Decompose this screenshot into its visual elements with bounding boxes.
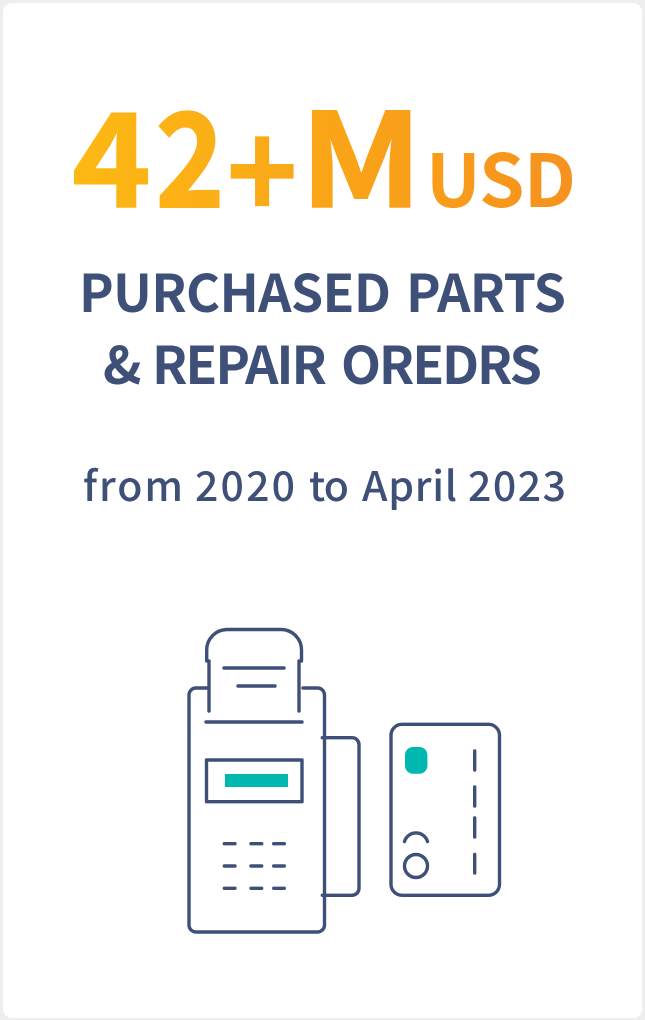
- side card reader: [322, 738, 359, 895]
- digit 2: 2: [156, 57, 225, 245]
- screen display bar: [225, 774, 288, 787]
- subheading: date range: [83, 453, 566, 513]
- date word: to: to: [309, 453, 349, 513]
- card circle: [404, 854, 428, 878]
- headline figure: 42+M USD: [72, 56, 576, 258]
- card dashes: [473, 751, 476, 873]
- date word: 2020: 2020: [195, 453, 295, 513]
- contactless arc: [404, 833, 428, 842]
- terminal screen: [206, 760, 302, 802]
- card outline: [391, 724, 500, 895]
- heading word: REPAIR: REPAIR: [152, 324, 327, 399]
- date word: from: from: [83, 453, 183, 513]
- digit 4: 4: [72, 57, 151, 245]
- icon: credit card: [391, 724, 500, 895]
- plus sign: +: [226, 70, 298, 258]
- card chip: [405, 747, 427, 774]
- date word: 2023: 2023: [468, 453, 566, 513]
- terminal body: [189, 688, 324, 932]
- heading word: ampersand: &: [103, 324, 141, 399]
- receipt lines: [224, 668, 284, 686]
- heading: purchased parts and repair orders: [79, 252, 566, 399]
- date word: April: April: [362, 453, 457, 513]
- heading word: PARTS: PARTS: [406, 252, 566, 327]
- heading word: OREDRS: OREDRS: [341, 324, 542, 399]
- terminal paper cover: [207, 630, 302, 661]
- keypad: [224, 844, 284, 888]
- icon: payment terminal: [189, 630, 359, 932]
- letter M: M: [300, 56, 423, 245]
- receipt paper: [209, 661, 299, 711]
- paper slot: [206, 720, 302, 724]
- heading word: PURCHASED: PURCHASED: [79, 252, 391, 327]
- unit USD: USD: [426, 123, 576, 229]
